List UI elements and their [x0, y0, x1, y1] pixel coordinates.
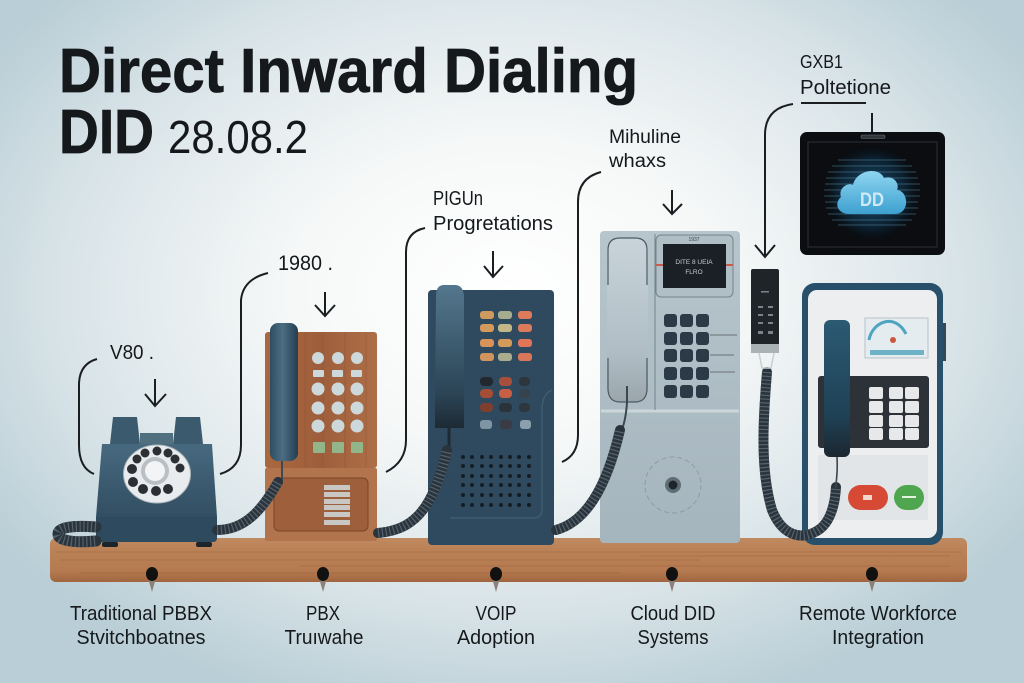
title: [59, 37, 638, 167]
stage labels: Remote Workforce: [799, 603, 957, 625]
display: 1937: [688, 237, 700, 243]
callout 4: Mihuline whaxs: [562, 127, 682, 462]
arrow: [755, 245, 775, 257]
callout 4: Mihuline whaxs: whaxs: [608, 151, 666, 172]
keypad: [664, 314, 709, 398]
handset: [270, 323, 298, 461]
keypad: [312, 352, 364, 453]
wooden shelf: [50, 538, 967, 592]
stage labels: Integration: [832, 627, 924, 649]
title: 28.08.2: [168, 111, 308, 163]
indicator buttons: [480, 311, 532, 429]
handset: [435, 285, 464, 428]
callout 5: GXB1 Poltetione: [755, 52, 891, 257]
callout 5: GXB1 Poltetione: Poltetione: [800, 77, 891, 99]
stage labels: Cloud DID: [630, 603, 716, 625]
dial mechanism: [645, 457, 701, 513]
callout 1: V80: [79, 342, 166, 474]
callout 3: Progretations: PIGUn: [433, 188, 483, 210]
remote handset device with coiled cord: [751, 269, 837, 536]
coiled cords between phones: [58, 430, 620, 542]
callout 1: V80: V80 .: [110, 342, 154, 364]
phone 5: modern office phone: [802, 283, 946, 545]
display: DITE 8 UEIA: [675, 259, 713, 266]
stage labels: PBX: [306, 603, 340, 625]
stage labels: Truıwahe: [284, 627, 364, 649]
speaker slats: [324, 485, 350, 525]
callout 3: Progretations: Progretations: [433, 213, 553, 235]
tablet with cloud DID: [800, 132, 945, 255]
stage labels: Traditional PBBX: [70, 603, 212, 625]
arrow: [663, 190, 682, 214]
callout 2: 1980: 1980 .: [278, 252, 333, 275]
stage labels: VOIP: [476, 603, 516, 625]
phone 3: navy desk phone: [428, 285, 554, 545]
call buttons: [848, 485, 924, 510]
phone 4: grey digital phone: [600, 231, 740, 543]
arrow: [484, 251, 503, 277]
stage labels: Systems: [638, 627, 708, 649]
display: FLRO: [685, 269, 703, 276]
title: DID: [59, 98, 154, 167]
title: Direct Inward Dialing: [59, 37, 638, 106]
cloud icon: DD: [860, 190, 884, 211]
stage labels: Stvitchboatnes: [76, 627, 206, 649]
arrow: [315, 292, 335, 316]
black keypad panel: [818, 376, 929, 448]
phone 2: wooden wall phone: [265, 323, 377, 541]
cloud icon: [837, 171, 906, 214]
callout 3: Progretations: [386, 188, 553, 472]
rotary dial: [124, 445, 190, 503]
display: [656, 235, 733, 297]
arrow: [145, 379, 166, 406]
phone 1: rotary telephone: [96, 417, 217, 547]
speaker grille: [461, 455, 531, 507]
ID card: [865, 318, 928, 358]
stage labels: Adoption: [457, 627, 535, 649]
callout 5: GXB1 Poltetione: GXB1: [800, 52, 843, 72]
callout 2: 1980: [220, 252, 335, 474]
stage labels: [70, 603, 957, 649]
keys: [869, 387, 919, 440]
handset: [824, 320, 850, 457]
handset: [607, 238, 648, 402]
callout 4: Mihuline whaxs: Mihuline: [609, 127, 681, 148]
timeline pins: [146, 567, 878, 592]
